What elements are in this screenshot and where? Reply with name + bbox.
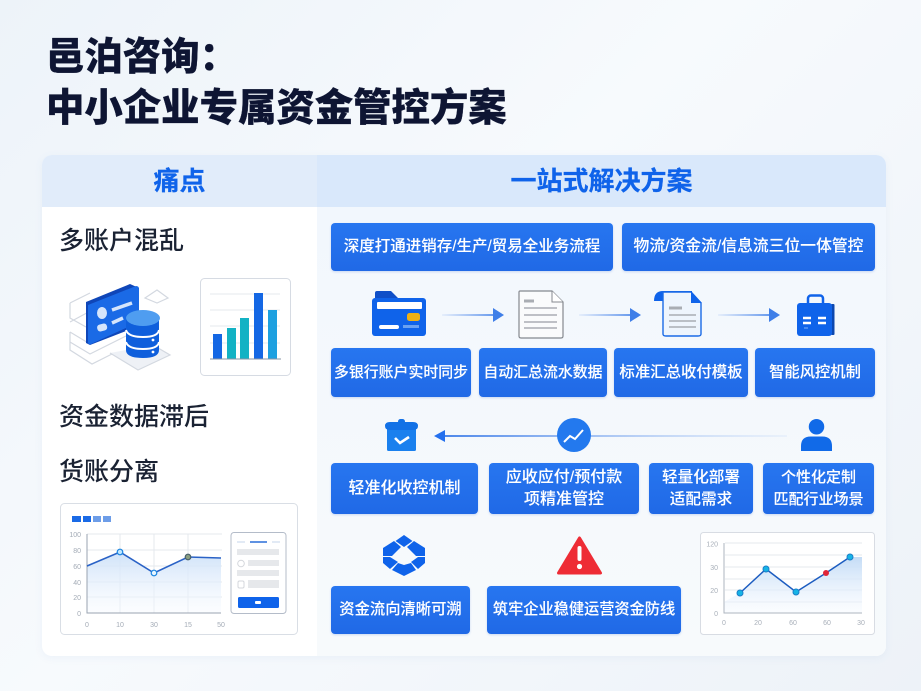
button — [331, 348, 471, 397]
chart: trend line card: 120 — [706, 542, 718, 548]
button — [614, 348, 748, 397]
header: pain points: 痛点 — [153, 166, 206, 196]
button — [487, 586, 681, 634]
button — [489, 463, 639, 514]
button: 标准汇总收付模板 — [619, 364, 743, 380]
pain point: multi-account chaos: 多账户混乱 — [59, 227, 184, 255]
illustration: line chart dashboard card: 80 — [73, 548, 81, 555]
illustration: line chart dashboard card: 15 — [184, 622, 192, 629]
button: 资金流向清晰可溯 — [339, 601, 462, 618]
pain point: delayed funds data: 资金数据滞后 — [59, 403, 209, 431]
icon: user — [801, 419, 832, 451]
chart: trend line card: 20 — [754, 620, 762, 627]
button: 适配需求 — [670, 490, 732, 508]
button: 物流/资金流/信息流三位一体管控 — [634, 238, 863, 255]
illustration: line chart dashboard card: 0 — [85, 622, 89, 629]
solution column background — [317, 207, 886, 656]
button: 应收应付/预付款 — [506, 468, 622, 486]
button: 项精准管控 — [524, 490, 604, 508]
button: 个性化定制 — [781, 468, 856, 486]
button — [622, 223, 875, 271]
arrow: flow left — [434, 430, 787, 442]
chart: trend line card: 60 — [823, 620, 831, 627]
icon: document — [518, 290, 564, 339]
icon: template document — [654, 291, 702, 337]
button: 筑牢企业稳健运营资金防线 — [493, 601, 675, 618]
arrow — [442, 308, 504, 322]
header: pain points — [42, 155, 317, 207]
header: one-stop solution: 一站式解决方案 — [510, 166, 692, 196]
illustration: line chart dashboard card: 10 — [116, 622, 124, 629]
pain point: goods and accounts separated: 货账分离 — [59, 458, 159, 486]
chart: trend line card: 20 — [710, 588, 718, 595]
illustration: line chart dashboard card: 30 — [150, 622, 158, 629]
chart: trend line card: 0 — [714, 611, 718, 618]
button: 多银行账户实时同步 — [334, 364, 468, 380]
button: 智能风控机制 — [769, 364, 861, 380]
button: 轻准化收控机制 — [348, 480, 460, 496]
title — [46, 36, 507, 130]
main panel — [42, 155, 886, 656]
chart: trend line card: 30 — [710, 565, 718, 572]
button — [755, 348, 875, 397]
button — [649, 463, 753, 514]
arrow — [579, 308, 641, 322]
button: 匹配行业场景 — [773, 490, 864, 508]
illustration: line chart dashboard card: 20 — [73, 595, 81, 602]
icon: collection box with check — [385, 419, 418, 451]
illustration: line chart dashboard card: 0 — [77, 611, 81, 618]
button: 自动汇总流水数据 — [483, 364, 603, 380]
title: 邑泊咨询： — [46, 36, 238, 79]
button — [763, 463, 874, 514]
illustration: isometric cards and database — [69, 284, 171, 370]
icon: warning triangle — [557, 536, 602, 574]
illustration: line chart dashboard card: 40 — [73, 580, 81, 587]
button — [331, 463, 478, 514]
icon: bank card folder — [372, 291, 426, 336]
button: 轻量化部署 — [662, 468, 740, 486]
button — [331, 223, 613, 271]
illustration: bar chart card — [200, 278, 291, 376]
chart: trend line card — [700, 532, 875, 635]
illustration: line chart dashboard card: 50 — [217, 622, 225, 629]
illustration: line chart dashboard card — [60, 503, 298, 635]
title: 中小企业专属资金管控方案 — [46, 86, 507, 130]
button — [331, 586, 470, 634]
arrow — [718, 308, 780, 322]
icon: flow blocks — [383, 535, 425, 576]
icon: risk control case — [797, 294, 834, 336]
chart: trend line card: 0 — [722, 620, 726, 627]
icon: trend circle — [557, 418, 591, 452]
header: one-stop solution — [317, 155, 886, 207]
chart: trend line card: 60 — [789, 620, 797, 627]
button: 深度打通进销存/生产/贸易全业务流程 — [344, 238, 600, 255]
chart: trend line card: 30 — [857, 620, 865, 627]
illustration: line chart dashboard card: 100 — [69, 532, 81, 539]
illustration: line chart dashboard card: 60 — [73, 564, 81, 571]
button — [479, 348, 607, 397]
